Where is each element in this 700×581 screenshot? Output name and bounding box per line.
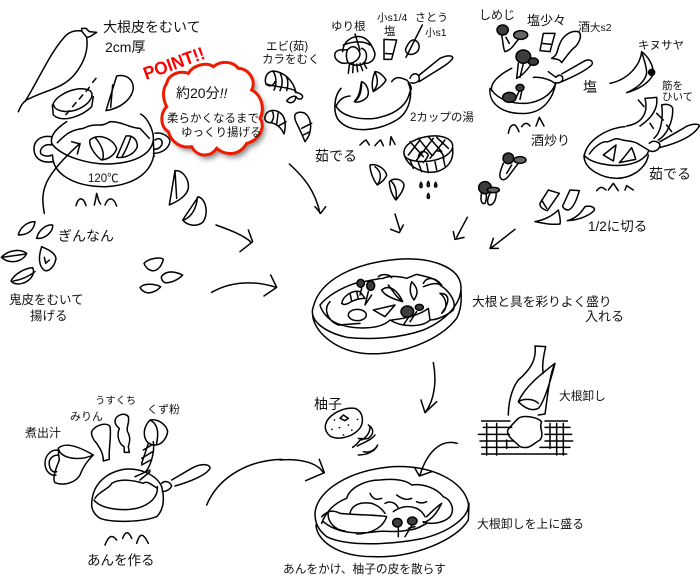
- label: little salt: 塩少々: [527, 13, 566, 28]
- icon: cooked shimeji: [481, 163, 518, 205]
- icon: sugar spoon: [406, 25, 422, 57]
- icon: flames: [597, 183, 633, 191]
- icon: frying pan: [490, 60, 592, 113]
- panel: shimeji sake-fry and snow peas: [479, 25, 699, 248]
- panel: making the sauce: [45, 414, 282, 545]
- label: cut in half: 1/2に切る: [588, 219, 647, 234]
- icon: flames: [508, 117, 544, 133]
- label: fry ginkgo: 揚げる: [30, 308, 68, 323]
- arrow: ginkgo into pot: [43, 142, 80, 213]
- icon: kuzu powder bowl: [135, 420, 168, 480]
- cloud text: 柔らかくなるまで: [167, 112, 259, 125]
- label: boil: 茹でる: [649, 166, 691, 182]
- label: remove strings 2: ひいて: [662, 91, 693, 103]
- icon: yuzu peels: [353, 425, 378, 455]
- heading: POINT: POINT!!: [141, 43, 208, 84]
- icon: usukuchi bottle: [115, 414, 130, 452]
- label: temperature: 120℃: [88, 173, 119, 185]
- icon: snow peas entering pan: [627, 97, 673, 140]
- icon: flames: [105, 533, 148, 545]
- label: salt: 塩: [384, 24, 396, 38]
- icon: grater: [478, 421, 573, 455]
- arrow: to platter far right: [490, 229, 515, 248]
- icon: snow peas: [610, 52, 653, 93]
- icon: mirin bottle: [92, 424, 110, 461]
- icon: sauce pan: [92, 465, 210, 521]
- label: remove strings: 筋を: [662, 79, 683, 92]
- label: kuzu: くず粉: [147, 403, 180, 416]
- arrow: to platter center: [391, 214, 403, 233]
- icon: flames under pot: [76, 193, 117, 206]
- label: put in: 入れる: [585, 309, 624, 324]
- icon: daikon slice: [52, 76, 133, 119]
- chart: platter contents: [320, 274, 454, 328]
- label: lily bulb: ゆり根: [331, 20, 366, 33]
- arrow: sauce to dish: [280, 459, 324, 481]
- label: arrange step: 大根と具を彩りよく盛り: [472, 295, 612, 309]
- callout: POINT cloud: [162, 62, 265, 159]
- icon: pitcher: [45, 445, 93, 484]
- icon: fried daikon wedges: [169, 171, 206, 225]
- label: salt: 塩: [583, 79, 597, 95]
- label: yuzu: 柚子: [314, 396, 342, 412]
- label: hot water: 2カップの湯: [410, 111, 474, 124]
- icon: lily bulb: [335, 34, 375, 73]
- icon: daikon on grater: [508, 346, 555, 448]
- label: usukuchi: うすくち: [95, 395, 136, 407]
- icon: peeled ginkgo nuts: [140, 258, 183, 293]
- icon: colander with drops: [404, 136, 453, 173]
- icon: flames: [360, 137, 395, 146]
- panel: grated daikon, yuzu and finished dish: [280, 346, 573, 557]
- icon: shrimp: [265, 71, 312, 142]
- cloud text: [167, 85, 262, 139]
- label: mirin: みりん: [70, 410, 103, 423]
- label: shimeji: しめじ: [479, 8, 515, 22]
- icon: shimeji falling into pan: [517, 63, 531, 78]
- label: boil: 茹でる: [315, 148, 357, 164]
- arrow: platter to finished dish: [421, 363, 437, 413]
- label: shell shrimp: カラをむく: [262, 53, 320, 66]
- icon: platter rim: [312, 259, 461, 354]
- arrow: sauce to dish: [207, 459, 282, 505]
- icon: salt packet: [540, 33, 555, 52]
- icon: salt packet: [384, 39, 397, 59]
- arrow: peeled ginkgo to platter: [212, 275, 277, 296]
- icon: pot with oil: [34, 114, 170, 187]
- icon: yuzu: [325, 408, 362, 438]
- label: ginkgo: ぎんなん: [58, 228, 114, 244]
- daikon and shrimp toppings: [320, 274, 454, 328]
- label: dashi: 煮出汁: [25, 426, 61, 440]
- cloud shadow: [165, 66, 265, 159]
- label: shrimp: エビ(茹): [266, 39, 308, 53]
- label: thickness: 2cm厚: [105, 39, 145, 55]
- icon: pan with snow peas: [584, 124, 699, 178]
- arrow: grated daikon to dish: [415, 442, 457, 476]
- label: sugar: さとう: [415, 11, 448, 24]
- panel: shrimp, lily bulb and boiling: [265, 25, 467, 239]
- label: sake: 酒大s2: [578, 20, 612, 34]
- label: make sauce: あんを作る: [87, 553, 154, 568]
- arrow: to platter right: [453, 217, 467, 239]
- label: finish: あんをかけ、柚子の皮を散らす: [283, 562, 446, 576]
- icon: sake bottle: [552, 31, 580, 63]
- label: top with grated daikon: 大根卸しを上に盛る: [477, 517, 584, 531]
- label: sake fry: 酒炒り: [531, 133, 570, 148]
- icon: finished dish: [315, 467, 469, 557]
- cloud outline: [162, 62, 262, 155]
- label: sugar amount: 小s1: [425, 27, 447, 39]
- label: daikon step: 大根皮をむいて: [103, 19, 201, 35]
- icon: frying pan with wedges: [335, 56, 453, 130]
- icon: daikon: [18, 28, 97, 112]
- icon: cut snow peas: [535, 190, 594, 224]
- arrow: to platter left: [289, 164, 326, 213]
- cloud text: ゆっくり揚げる: [181, 126, 262, 139]
- cloud text: 約20分!!: [176, 85, 227, 101]
- icon: shimeji: [502, 35, 518, 52]
- arrow: wedges to platter: [216, 225, 253, 252]
- label: salt amount: 小s1/4: [377, 12, 408, 24]
- panel: daikon and pot frying: [1, 28, 277, 296]
- label: snow peas: キヌサヤ: [638, 39, 684, 52]
- label: peel ginkgo: 鬼皮をむいて: [9, 292, 84, 307]
- icon: boiled wedges: [370, 165, 404, 200]
- label: grated daikon: 大根卸し: [559, 389, 606, 403]
- icon: ginkgo nuts: [1, 222, 56, 284]
